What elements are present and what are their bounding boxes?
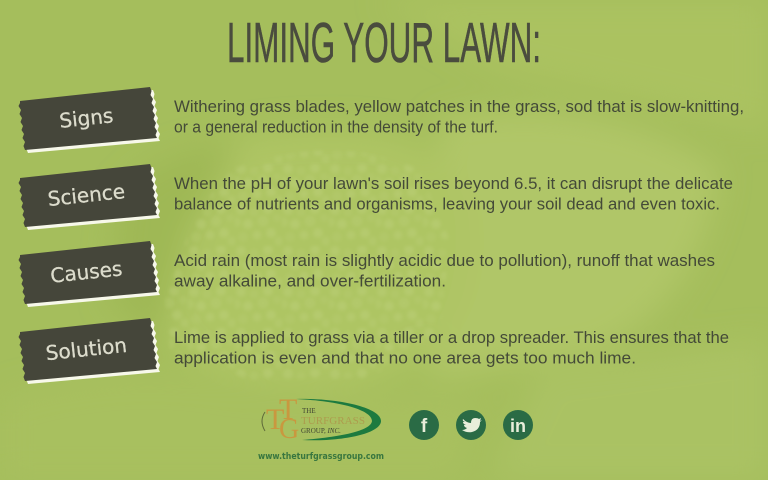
logo wordmark: TURFGRASS — [301, 416, 365, 427]
text block: signs: or a general reduction in the density of the turf. — [174, 118, 498, 136]
logo monogram: T — [266, 403, 284, 436]
label ribbon: signs: Signs — [58, 103, 114, 133]
logo: The Turfgrass Group — [262, 393, 381, 445]
label ribbon: science: Science — [46, 179, 126, 211]
logo monogram: G — [279, 414, 299, 445]
label ribbon: causes — [18, 241, 160, 307]
icon: linkedin: in — [510, 416, 526, 436]
logo swoosh — [296, 399, 381, 440]
label ribbon: solution: Solution — [44, 333, 128, 365]
icon: facebook: f — [421, 416, 428, 437]
logo monogram — [266, 393, 299, 445]
logo wordmark: GROUP, INC. — [301, 427, 341, 435]
text block: solution: Lime is applied to grass via a tiller or a drop spreader. This ensures that the — [174, 329, 729, 347]
text block: solution: application is even and that no one area gets too much lime. — [174, 350, 636, 368]
text block: causes: away alkaline, and over-fertilization. — [174, 272, 446, 290]
panel: signs — [18, 87, 744, 153]
text block: science: balance of nutrients and organisms, leaving your soil dead and even toxic. — [174, 196, 720, 214]
icon: twitter — [456, 410, 486, 440]
icon: facebook — [409, 410, 439, 440]
lime granule pile — [165, 150, 450, 380]
panel: solution — [18, 318, 729, 384]
text block: causes: Acid rain (most rain is slightly acidic due to pollution), runoff that washes — [174, 252, 715, 270]
logo monogram: T — [279, 393, 297, 426]
label ribbon: causes: Causes — [49, 256, 123, 288]
text block: science: When the pH of your lawn's soil rises beyond 6.5, it can disrupt the delicate — [174, 175, 733, 193]
website url: www.theturfgrassgroup.com — [258, 452, 384, 462]
label ribbon: solution — [18, 318, 160, 384]
logo wordmark — [301, 407, 365, 435]
label ribbon: science — [18, 164, 160, 230]
logo wordmark: THE — [302, 407, 316, 415]
icon: linkedin — [503, 410, 533, 440]
panel: causes — [18, 241, 715, 307]
label ribbon: signs — [18, 87, 160, 153]
text block: signs: Withering grass blades, yellow patches in the grass, sod that is slow-knitting, — [174, 98, 744, 116]
panel: science — [18, 164, 733, 230]
